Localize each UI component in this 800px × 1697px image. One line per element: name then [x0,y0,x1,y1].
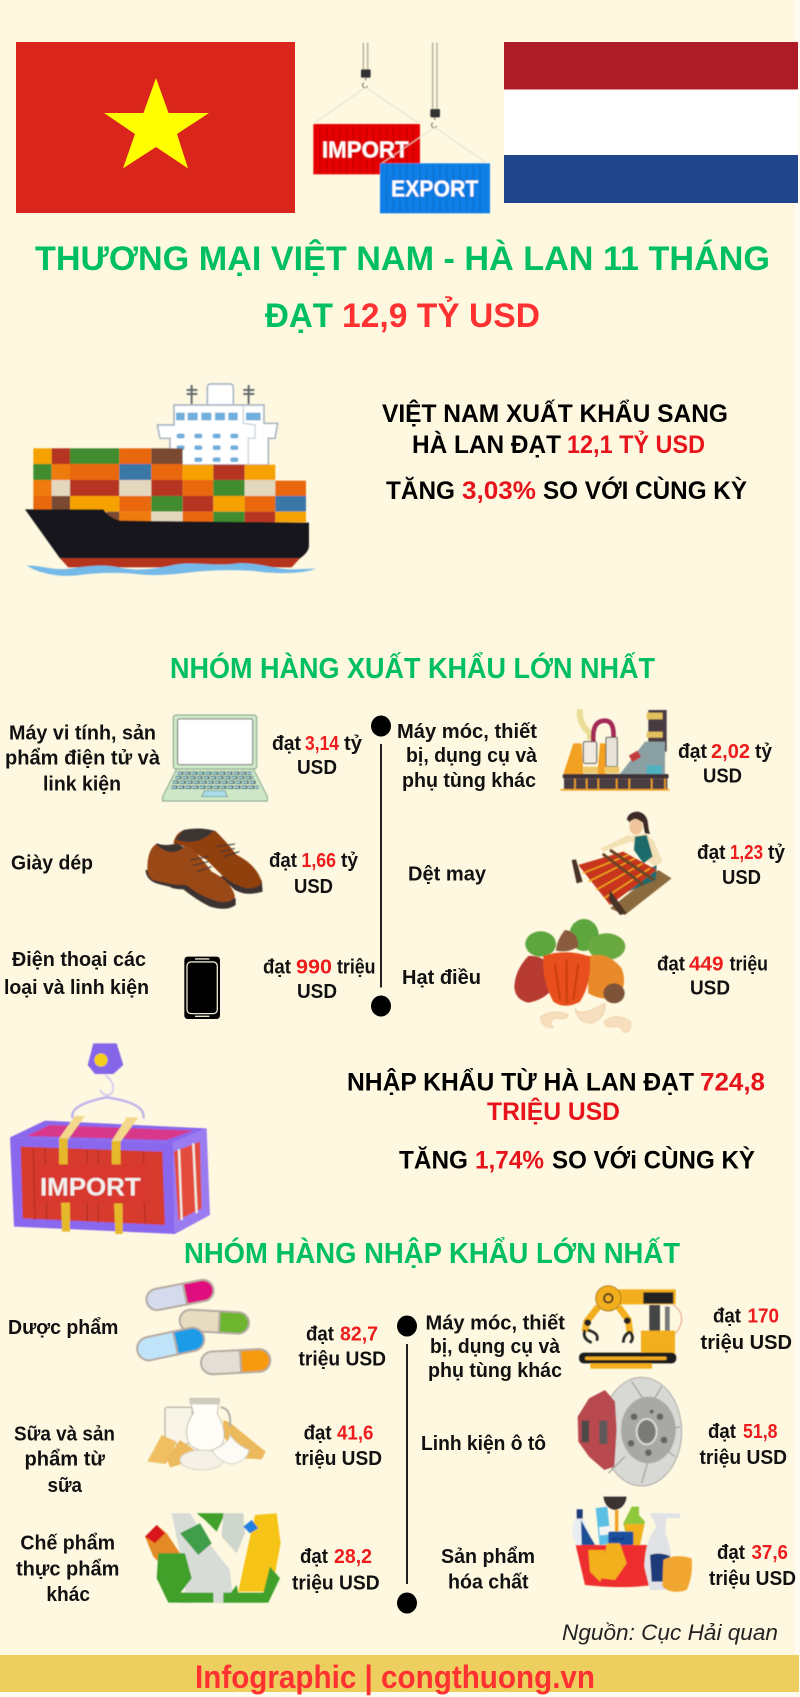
export item: cashews: đạt [657,954,685,976]
text block: import summary [347,1067,765,1174]
import item: machinery [426,1286,792,1382]
import item: machinery: 170 [748,1306,779,1328]
icon: shoes [145,829,263,909]
export item: phones: USD [297,981,337,1003]
export item: machinery: đạt [678,741,707,763]
import item: machinery: phụ tùng khác [428,1360,562,1382]
export item: computers: phẩm điện tử và [5,748,161,770]
icon: capsule pills [135,1278,271,1375]
export item: machinery: phụ tùng khác [402,770,536,792]
export item: computers: USD [297,757,337,779]
export item: machinery: Máy móc, thiết [397,721,537,743]
icon: brake disc [578,1377,682,1486]
export item: textiles [408,812,786,915]
import item: other food preparations: 28,2 [334,1546,372,1568]
source note: Nguồn: Cục Hải quan [562,1620,778,1645]
export item: footwear: USD [294,876,333,898]
icon: cashew fruits and nuts [514,919,631,1032]
export item: cashews: 449 [689,954,724,976]
export item: footwear: tỷ [341,850,359,872]
import item: car parts [421,1377,787,1486]
export item: computers: đạt [272,733,301,755]
export item: phones: đạt [263,957,291,979]
icon: import and export containers on crane hooks: IMPORT [322,136,409,162]
import item: other food preparations [16,1513,380,1606]
import item: pharmaceuticals: triệu USD [298,1349,386,1371]
icon: import and export containers on crane hooks: EXPORT [391,176,478,202]
export item: cashews: triệu [730,954,768,976]
export item: computers: Máy vi tính, sản [9,722,156,744]
text block: import summary: 1,74% [475,1146,544,1174]
text block: export summary: HÀ LAN ĐẠT [412,430,561,459]
import item: machinery: triệu USD [700,1332,792,1354]
export item: phones: triệu [337,957,376,979]
title [35,240,770,335]
import item: pharmaceuticals: đạt [306,1323,334,1345]
import item: machinery: Máy móc, thiết [426,1313,565,1335]
export item: phones: loại và linh kiện [4,977,149,999]
icon: robotic arm [579,1286,682,1369]
export item: textiles: Dệt may [408,864,487,886]
icon: cleaning products in a bucket [572,1497,692,1592]
import item: dairy: phẩm từ [24,1449,106,1471]
text block: export summary: TĂNG [386,476,455,505]
import item: other food preparations: khác [46,1584,90,1606]
export item: textiles: đạt [697,842,726,864]
import item: dairy: sữa [48,1475,83,1497]
footer band [0,1655,799,1695]
icon: smartphone [184,957,220,1019]
heading: largest import groups: NHÓM HÀNG NHẬP KHẨU LỚN NHẤT [184,1236,680,1270]
import item: chemical products [441,1497,796,1593]
flag: Vietnam [16,42,295,213]
import item: chemical products: triệu USD [709,1568,796,1590]
export item: machinery [397,709,773,792]
icon: container ship [25,384,316,576]
import item: other food preparations: Chế phẩm [20,1533,115,1555]
export item: machinery: USD [703,766,742,788]
import item: machinery: đạt [713,1306,741,1328]
export item: computers: link kiện [43,774,121,796]
import item: dairy [14,1398,382,1497]
export item: computers: 3,14 [305,733,340,755]
import item: dairy: triệu USD [295,1448,382,1470]
export item: textiles: 1,23 [730,842,763,864]
import item: pharmaceuticals: 82,7 [340,1323,378,1345]
export item: computers: tỷ [344,733,363,755]
export item: computers [5,715,363,801]
icon: milk and cheese [147,1398,266,1470]
text block: export summary: SO VỚI CÙNG KỲ [543,475,747,505]
export item: phones: 990 [296,957,332,979]
flag: Netherlands [504,42,798,203]
import item: chemical products: hóa chất [448,1571,529,1593]
timeline: imports [397,1316,417,1614]
icon: cleaning products in a bucket: SOAP [612,1537,625,1542]
import item: dairy: Sữa và sản [14,1424,115,1446]
icon: import crate on crane hook [10,1043,210,1234]
title: THƯƠNG MẠI VIỆT NAM - HÀ LAN 11 THÁNG [35,240,770,278]
text block: export summary: 3,03% [462,477,536,505]
import item: pharmaceuticals [8,1278,386,1375]
import item: car parts: triệu USD [700,1447,787,1469]
import item: machinery: bị, dụng cụ và [430,1336,561,1358]
text block: import summary: TĂNG [399,1146,468,1174]
import item: other food preparations: thực phẩm [16,1558,119,1580]
export item: cashews [402,919,768,1032]
export item: footwear: đạt [269,850,297,872]
export item: textiles: USD [722,867,761,889]
export item: footwear: Giày dép [11,853,93,875]
import item: chemical products: Sản phẩm [441,1546,535,1568]
import item: chemical products: 37,6 [752,1542,788,1564]
export item: machinery: 2,02 [711,741,750,763]
text block: import summary: TRIỆU USD [487,1096,620,1126]
heading: largest export groups: NHÓM HÀNG XUẤT KHẨU LỚN NHẤT [170,651,655,685]
import item: chemical products: đạt [717,1542,745,1564]
text block: import summary: NHẬP KHẨU TỪ HÀ LAN ĐẠT [347,1067,694,1097]
footer band: Infographic | congthuong.vn [195,1659,595,1695]
import item: dairy: 41,6 [337,1422,374,1444]
text block: import summary: SO VỚi CÙNG KỲ [552,1144,755,1174]
icon: woman weaving at a loom [572,812,672,915]
title: ĐẠT [265,297,333,335]
export item: footwear: 1,66 [302,850,336,872]
icon: laptop [163,715,267,801]
timeline: exports [371,716,391,1016]
import item: car parts: 51,8 [743,1421,778,1443]
export item: phones [4,949,376,1019]
export item: textiles: tỷ [768,842,786,864]
export item: cashews: USD [690,978,730,1000]
export item: footwear [11,829,359,909]
icon: import and export containers on crane hooks [313,43,490,213]
text block: import summary: 724,8 [700,1069,765,1097]
icon: import crate on crane hook: IMPORT [40,1174,141,1202]
import item: pharmaceuticals: Dược phẩm [8,1317,118,1339]
text block: export summary: 12,1 TỶ USD [567,429,705,459]
import item: car parts: Linh kiện ô tô [421,1433,546,1455]
import item: other food preparations: triệu USD [292,1572,380,1594]
export item: machinery: tỷ [755,741,773,763]
export item: phones: Điện thoại các [12,949,146,971]
import item: other food preparations: đạt [300,1546,328,1568]
export item: machinery: bị, dụng cụ và [406,745,538,767]
text block: export summary: VIỆT NAM XUẤT KHẨU SANG [382,398,728,428]
title: 12,9 TỶ USD [342,297,540,335]
import item: dairy: đạt [304,1422,332,1444]
import item: car parts: đạt [708,1421,736,1443]
text block: export summary [382,398,747,505]
icon: recycled plastic bottles [145,1513,281,1603]
icon: factory machine [561,709,669,791]
export item: cashews: Hạt điều [402,967,481,989]
